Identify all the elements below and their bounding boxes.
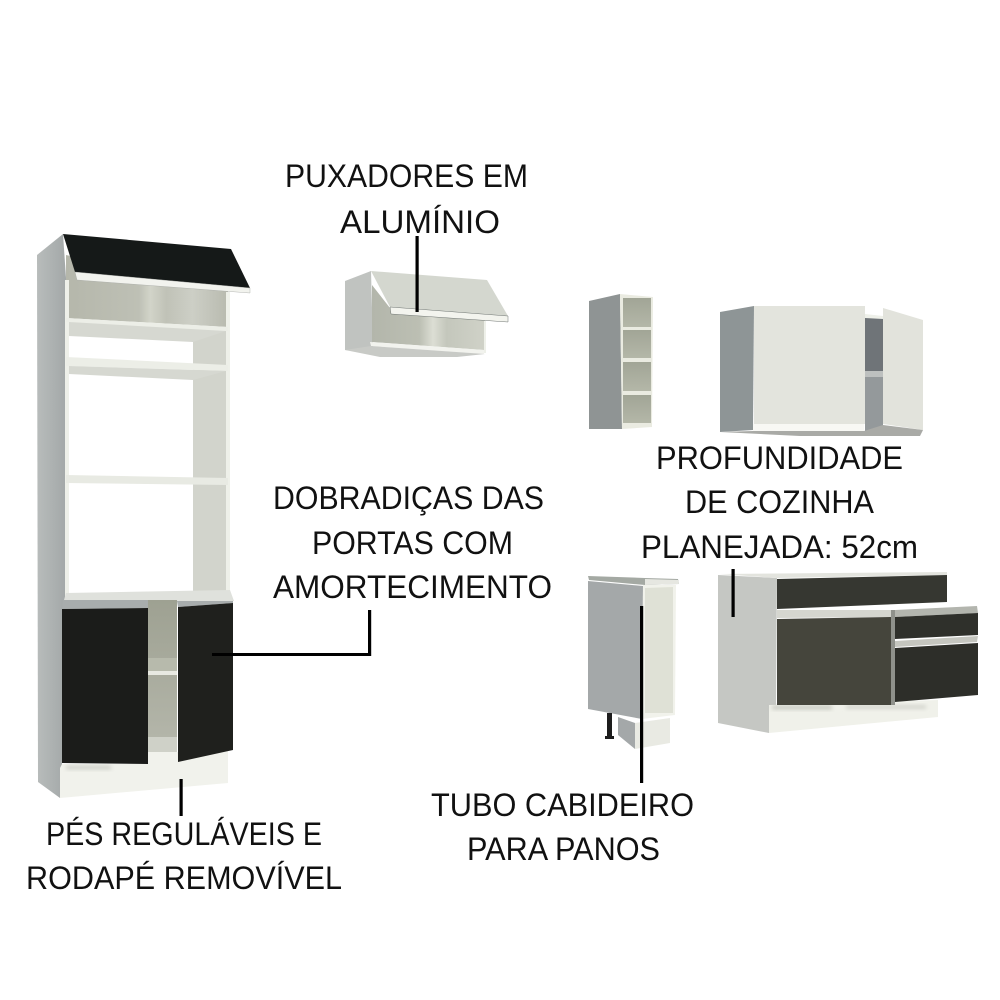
label: profundidade: DE COZINHA <box>685 484 875 520</box>
adjustable foot <box>607 713 612 737</box>
wall cabinet side <box>345 271 373 352</box>
base cabinet with drawers <box>718 572 978 733</box>
drawer cabinet top edge <box>719 572 947 578</box>
leader: puxadores <box>416 236 419 312</box>
label: tubo cabideiro: TUBO CABIDEIRO <box>431 787 694 823</box>
base cabinet plinth <box>618 717 635 749</box>
label: pés reguláveis: RODAPÉ REMOVÍVEL <box>26 860 342 896</box>
corner cabinet handle <box>753 424 864 431</box>
right upper drawer <box>895 613 978 639</box>
leader: tubo cabideiro <box>640 606 643 783</box>
right top strip <box>895 606 978 617</box>
tower plinth door shadow <box>66 766 112 769</box>
drawer cabinet side <box>718 575 777 733</box>
label: dobradiças: PORTAS COM <box>312 525 513 561</box>
shelf cabinet side <box>589 294 622 429</box>
tower upper compartment back <box>66 255 228 327</box>
label: pés reguláveis: PÉS REGULÁVEIS E <box>46 816 322 852</box>
corner wall cabinet with open door <box>720 306 923 436</box>
label: puxadores em alumínio: ALUMÍNIO <box>340 204 500 240</box>
drawer cabinet plinth <box>769 700 938 733</box>
tower black lift door <box>63 234 250 288</box>
label: pés reguláveis <box>26 816 342 896</box>
narrow open shelf cabinet <box>589 294 653 429</box>
label: profundidade <box>641 440 918 565</box>
corner cabinet open door <box>883 308 923 430</box>
label: dobradiças: DOBRADIÇAS DAS <box>273 480 544 516</box>
middle aluminium strip <box>895 636 978 647</box>
leader: dobradiças <box>212 610 371 656</box>
tower door aluminium handle <box>75 272 250 293</box>
tower lower counter top <box>64 590 234 602</box>
corner cabinet underside <box>720 425 923 436</box>
base cabinet worktop <box>588 576 679 585</box>
narrow base cabinet with towel rail <box>588 576 679 749</box>
label: tubo cabideiro: PARA PANOS <box>467 831 660 867</box>
wall cabinet bottom edge <box>370 342 484 354</box>
label: puxadores em alumínio <box>285 158 528 240</box>
label: dobradiças <box>273 480 552 605</box>
shelf compartments <box>623 298 651 423</box>
tall oven tower cabinet <box>37 234 250 798</box>
label: dobradiças: AMORTECIMENTO <box>273 569 552 605</box>
large black door <box>777 617 891 705</box>
tower side panel <box>37 234 66 798</box>
corner cabinet main door <box>754 306 865 424</box>
tower right black door <box>178 603 233 762</box>
shelf cabinet frame <box>620 294 653 429</box>
tower inner compartment with shelf <box>148 600 177 753</box>
corner cabinet interior <box>865 314 883 431</box>
leader: pés reguláveis <box>180 779 183 816</box>
tower left black door <box>62 608 148 764</box>
tower plinth <box>60 745 228 798</box>
wall cabinet lift door <box>371 271 508 316</box>
wall cabinet aluminium handle <box>390 307 508 322</box>
tower frame and shelves <box>65 280 230 600</box>
label: tubo cabideiro <box>431 787 694 867</box>
drawer plinth shadows <box>772 706 926 709</box>
label: puxadores em alumínio: PUXADORES EM <box>285 158 528 194</box>
base cabinet side <box>588 581 643 719</box>
aluminium strip <box>777 610 892 618</box>
drawer divider <box>891 610 895 705</box>
right lower drawer <box>895 643 978 702</box>
corner cabinet side <box>720 306 754 432</box>
label: profundidade: PLANEJADA: 52cm <box>641 529 918 565</box>
base cabinet front frame <box>642 585 676 719</box>
aluminium handle wall cabinet <box>345 271 508 357</box>
leader: profundidade <box>732 569 735 617</box>
top black drawer <box>777 575 947 609</box>
wall cabinet interior <box>372 285 485 350</box>
label: profundidade: PROFUNDIDADE <box>656 440 903 476</box>
leader lines <box>180 236 735 816</box>
